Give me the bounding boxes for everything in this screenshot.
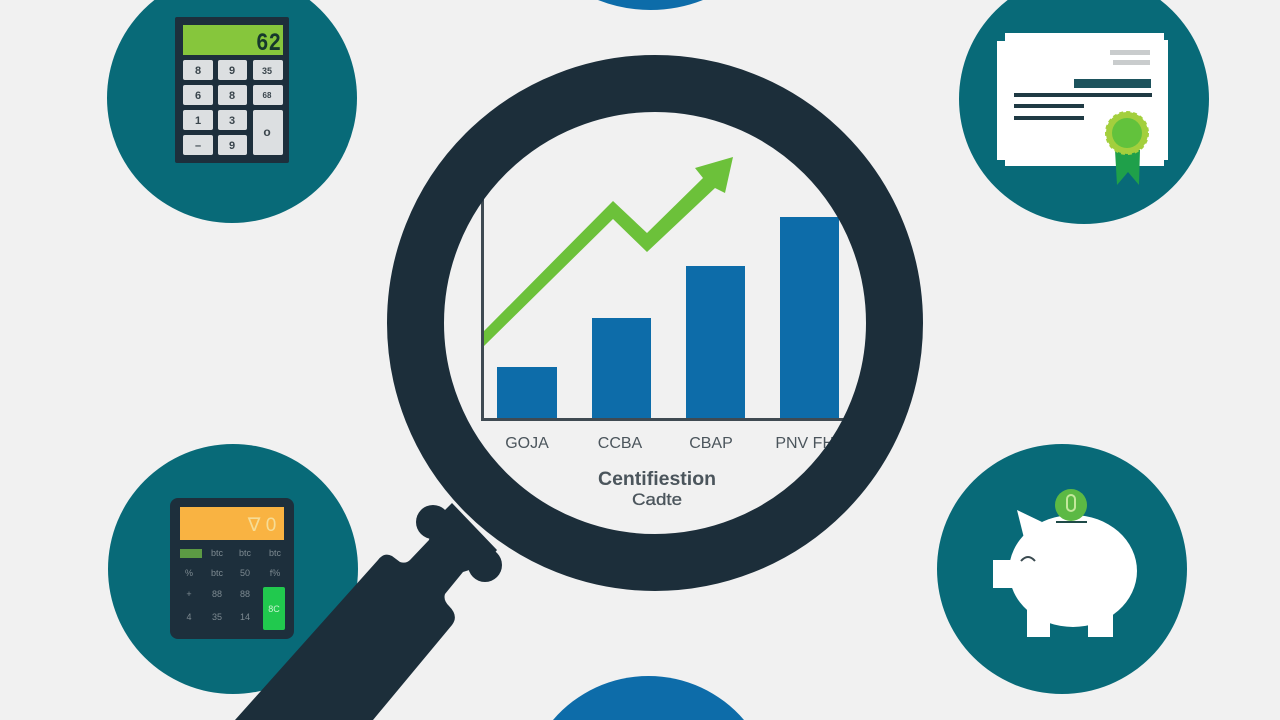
panel: lens with bar chart <box>443 111 867 535</box>
calculator body <box>170 498 294 639</box>
key labels: 6 <box>195 90 201 102</box>
key labels: 50 <box>240 568 250 578</box>
piggy body <box>993 510 1137 637</box>
magnifying glass ring <box>416 84 894 562</box>
award seal <box>1106 112 1148 154</box>
key labels: 1 <box>195 115 201 127</box>
chart subtitle: Cadte <box>632 490 682 509</box>
key labels: 88 <box>212 589 222 599</box>
green tall key <box>263 587 285 630</box>
keypad <box>183 60 283 155</box>
key labels <box>185 548 281 622</box>
axis labels <box>505 435 845 452</box>
key labels: 35 <box>212 612 222 622</box>
green tall key: 8C <box>268 604 280 614</box>
axis labels: CCBA <box>598 435 643 452</box>
axis labels: PNV FHS <box>775 435 845 452</box>
key labels: % <box>185 568 193 578</box>
key labels: 88 <box>240 589 250 599</box>
axis labels: CBAP <box>689 435 733 452</box>
key labels: btc <box>269 548 281 558</box>
key labels <box>195 65 272 152</box>
key labels: 4 <box>186 612 192 622</box>
green display <box>183 25 283 58</box>
key labels: 8 <box>195 65 201 77</box>
key labels: 68 <box>263 91 272 100</box>
chart title: Centifiestion <box>598 469 716 490</box>
orange display: ∇ 0 <box>247 515 276 536</box>
key labels: btc <box>211 548 223 558</box>
bar chart <box>482 157 850 509</box>
key labels: 8 <box>229 90 235 102</box>
axis labels: GOJA <box>505 435 549 452</box>
key labels: btc <box>239 548 251 558</box>
partial blue circle: bottom <box>553 676 744 720</box>
teal circle background <box>107 0 357 223</box>
green trend arrow <box>484 157 733 346</box>
award ribbon <box>1115 150 1140 185</box>
key labels: btc <box>211 568 223 578</box>
key labels: – <box>195 140 201 152</box>
green small key <box>180 549 202 558</box>
coin <box>1055 489 1087 521</box>
certificate text lines <box>1014 79 1152 120</box>
piggy eye <box>1021 557 1035 561</box>
teal circle background <box>959 0 1209 224</box>
teal circle background <box>937 444 1187 694</box>
green display: 62 <box>256 29 281 58</box>
key labels: o <box>263 125 271 139</box>
key labels: + <box>186 589 192 599</box>
key labels: 35 <box>262 66 272 76</box>
teal circle background <box>108 444 358 694</box>
partial blue circle: top <box>598 0 703 10</box>
key labels: f% <box>270 568 280 578</box>
panel: green calculator <box>107 0 357 223</box>
bars <box>497 217 839 419</box>
key labels: 14 <box>240 612 250 622</box>
lens interior <box>443 111 867 535</box>
coin slot <box>1056 521 1087 523</box>
orange display <box>180 507 284 540</box>
certificate paper <box>997 33 1168 166</box>
panel: piggy bank <box>937 444 1187 694</box>
panel: certificate <box>959 0 1209 224</box>
key labels: 9 <box>229 65 235 77</box>
chart axes <box>482 195 850 420</box>
panel: orange calculator <box>108 444 358 694</box>
certificate header lines <box>1110 50 1150 65</box>
key labels: 9 <box>229 140 235 152</box>
calculator body <box>175 17 289 163</box>
magnifying glass handle <box>235 503 502 720</box>
key labels: 3 <box>229 115 235 127</box>
